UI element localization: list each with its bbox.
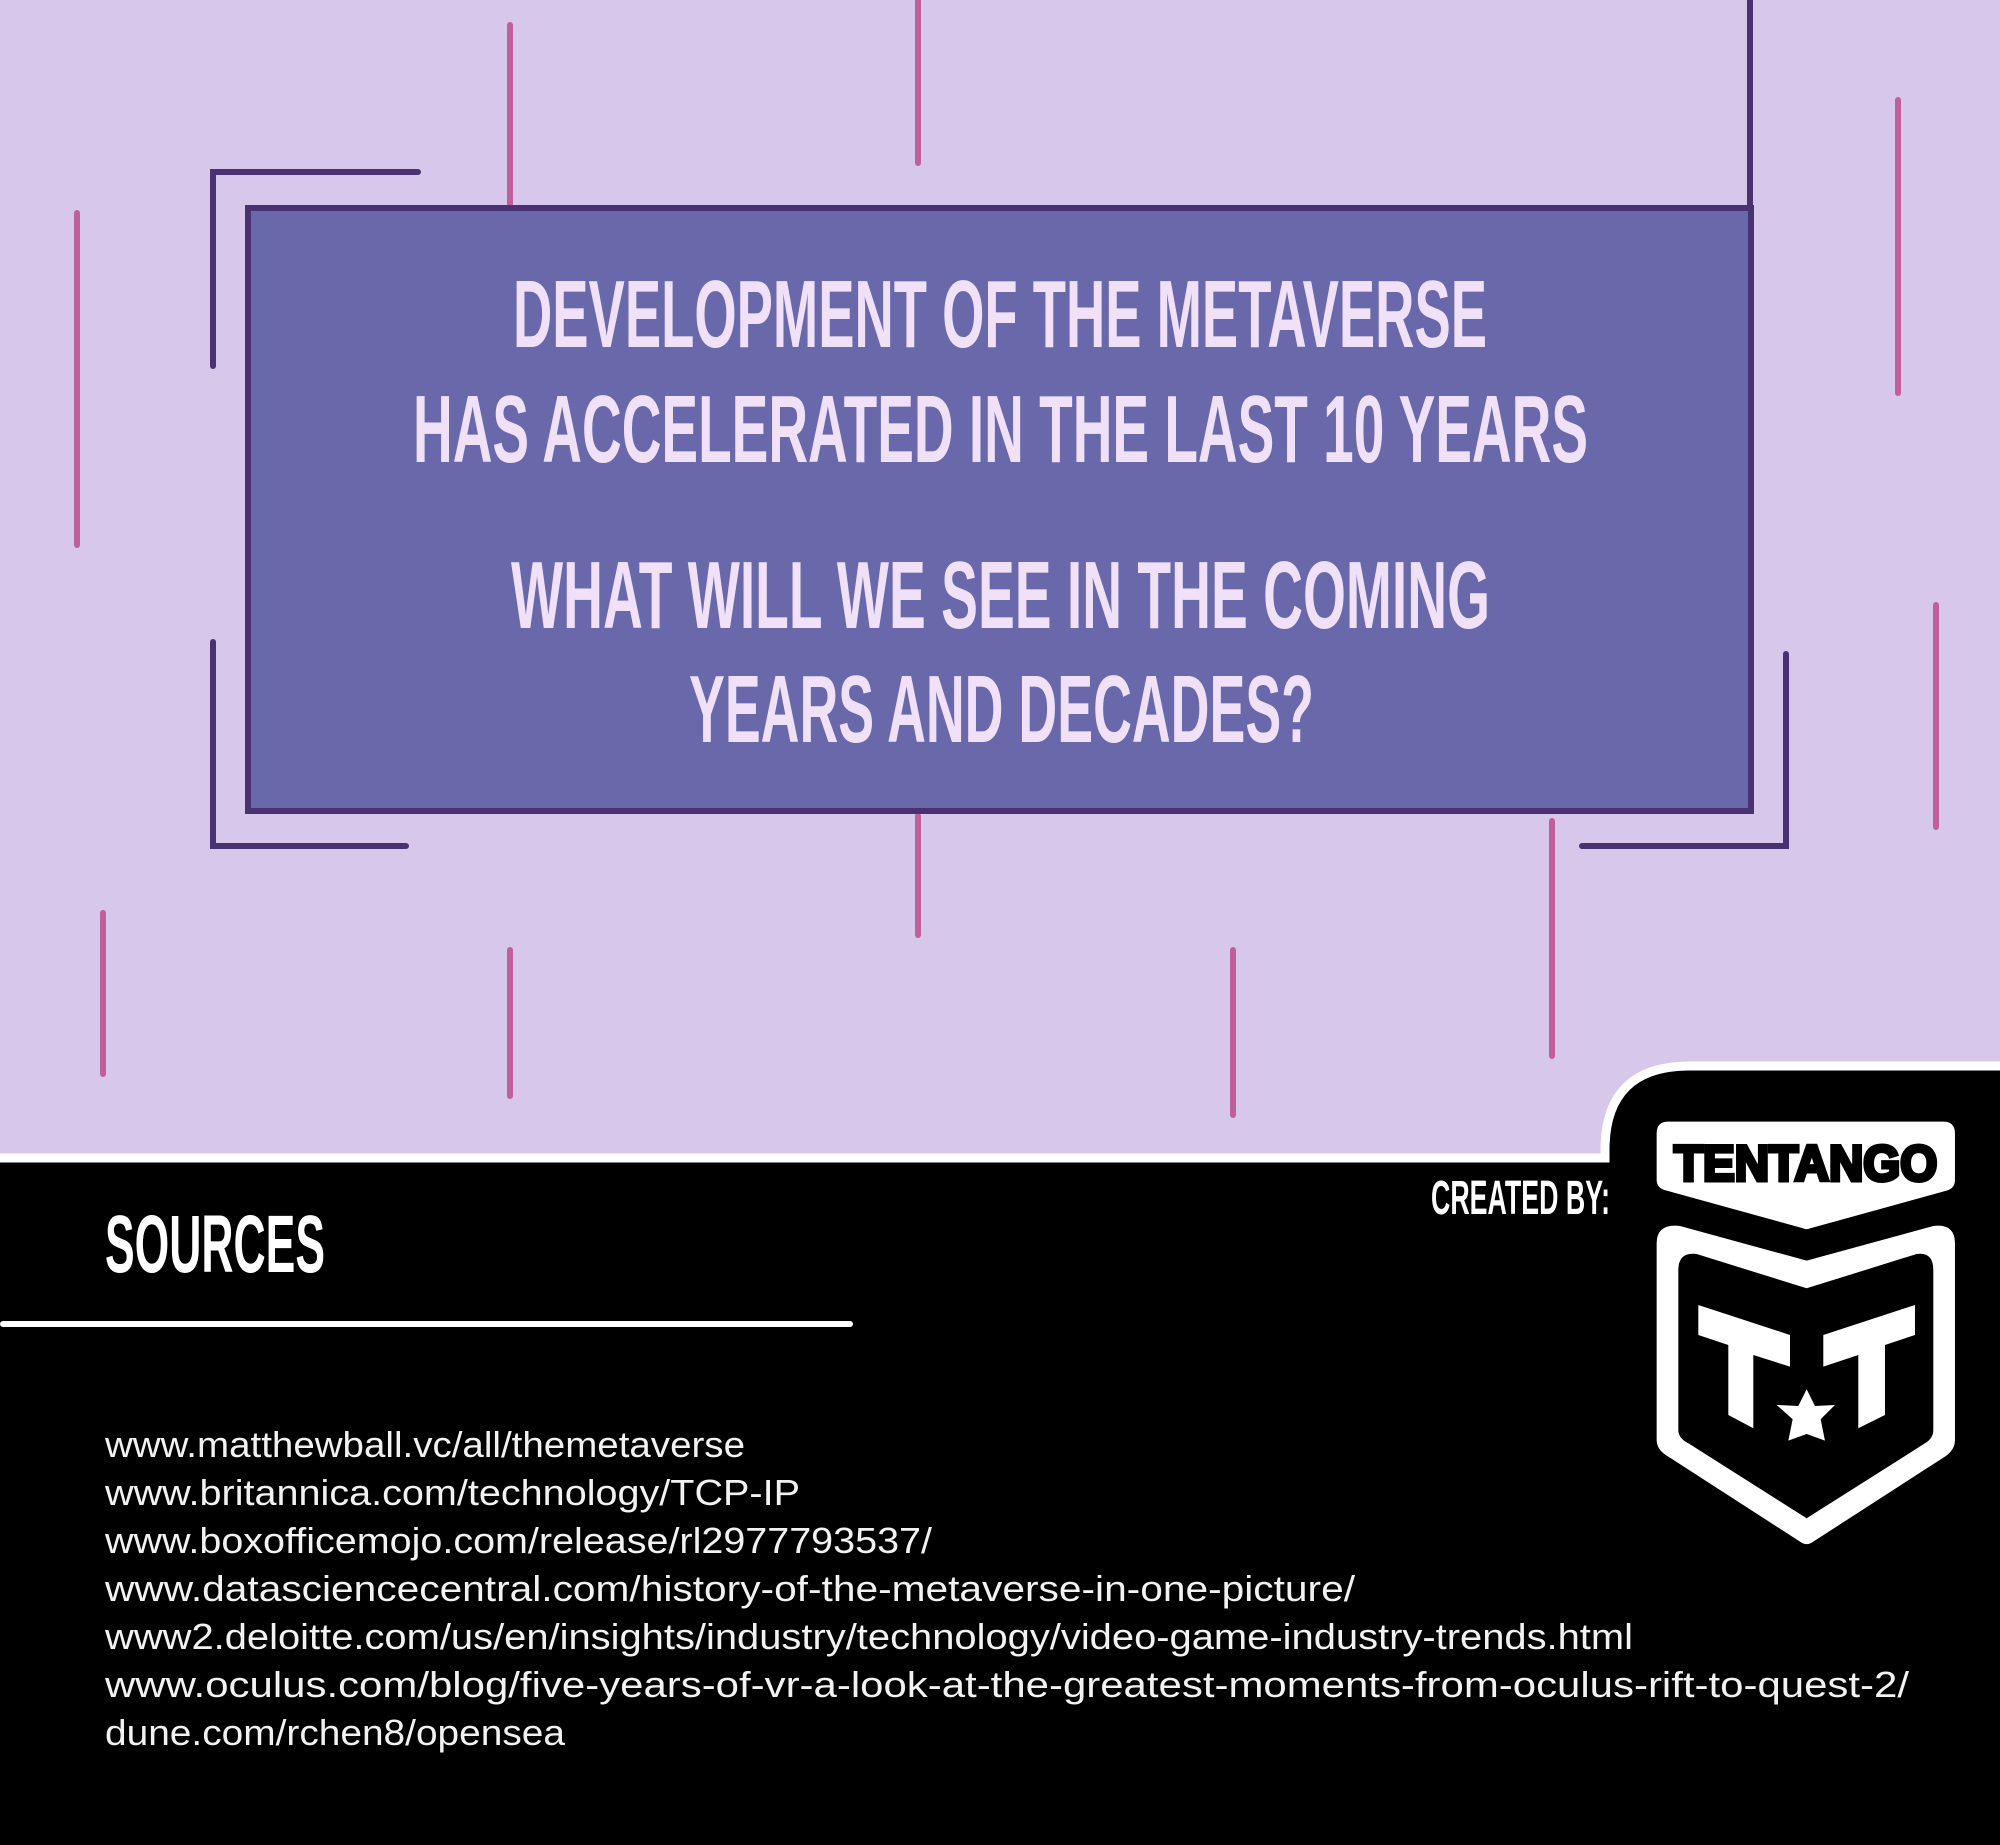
created by label: CREATED BY: xyxy=(1431,1172,1610,1225)
source list: www.matthewball.vc/all/themetaverse xyxy=(104,1424,745,1465)
title text: YEARS AND DECADES? xyxy=(689,656,1314,763)
source list: www.britannica.com/technology/TCP-IP xyxy=(104,1472,800,1513)
source list: www.oculus.com/blog/five-years-of-vr-a-look-at-the-greatest-moments-from-oculus-rift-to-quest-2/ xyxy=(104,1664,1909,1705)
logo: Tentango xyxy=(1657,1122,1955,1544)
source list: www.datasciencecentral.com/history-of-the-metaverse-in-one-picture/ xyxy=(104,1568,1355,1609)
pink decorative lines xyxy=(77,0,1936,1115)
title box xyxy=(248,208,1751,811)
logo: Tentango: TENTANGO xyxy=(1674,1136,1937,1192)
title text xyxy=(413,261,1588,763)
source list xyxy=(104,1424,1909,1753)
source list: www2.deloitte.com/us/en/insights/industry/technology/video-game-industry-trends.html xyxy=(104,1616,1633,1657)
brackets xyxy=(213,0,1786,846)
source list: dune.com/rchen8/opensea xyxy=(105,1712,566,1753)
sources underline xyxy=(0,1321,853,1327)
source list: www.boxofficemojo.com/release/rl2977793537/ xyxy=(104,1520,932,1561)
bottom black panel xyxy=(0,1066,2000,1845)
sources heading: SOURCES xyxy=(105,1199,325,1290)
